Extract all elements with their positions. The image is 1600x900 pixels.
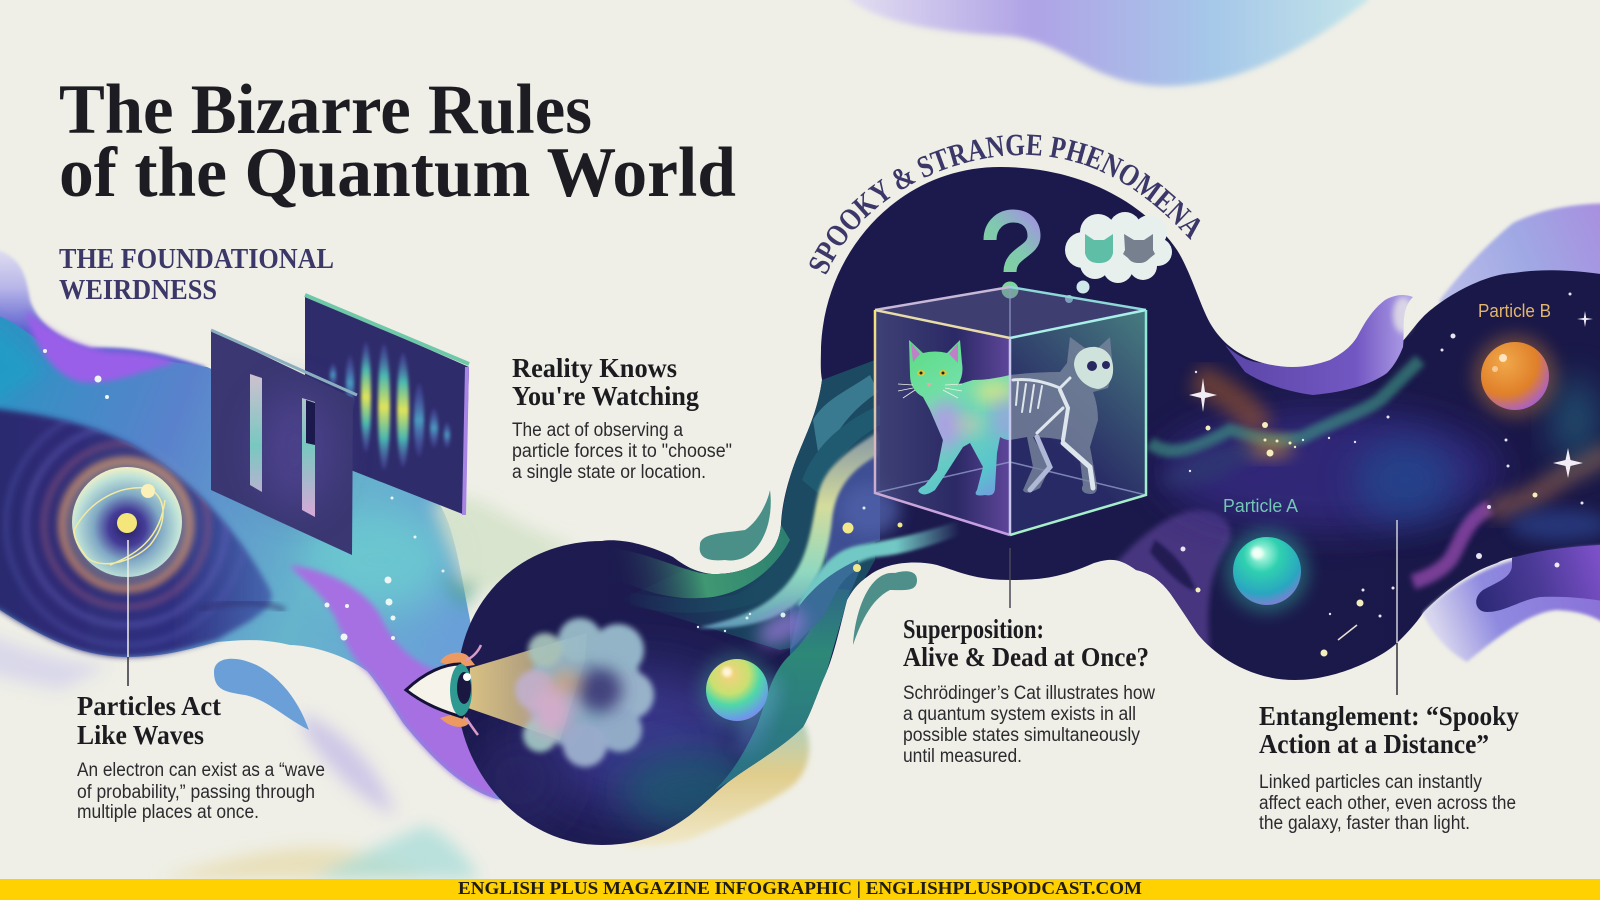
text block: particles act like waves: An electron can exist as a “wave bbox=[77, 760, 325, 781]
title: The Bizarre Rules bbox=[59, 71, 592, 149]
text block: superposition: Alive & Dead at Once? bbox=[903, 642, 1149, 672]
text block: superposition: Schrödinger’s Cat illustrates how bbox=[903, 683, 1155, 704]
living half bbox=[909, 340, 1009, 496]
text block: superposition bbox=[903, 614, 1155, 767]
purple crest of the entanglement field bbox=[1225, 295, 1413, 395]
flow base bbox=[646, 360, 875, 650]
section heading foundational weirdness: THE FOUNDATIONAL bbox=[59, 244, 334, 275]
dark wave with ripples around the electron bbox=[0, 405, 285, 657]
probability cloud bbox=[515, 618, 654, 767]
green band bbox=[628, 525, 790, 598]
main dark observer and phenomena blob bbox=[457, 167, 1600, 845]
cat body half alive half skeleton bbox=[898, 335, 1113, 500]
text block: particles act like waves: multiple places at once. bbox=[77, 802, 259, 823]
foundational wave stream bbox=[0, 247, 500, 800]
text block: reality knows you're watching: You're Watching bbox=[512, 381, 699, 411]
text block: reality knows you're watching: a single state or location. bbox=[512, 462, 706, 483]
electron sphere bbox=[63, 458, 191, 586]
flow star dust bbox=[842, 522, 902, 572]
text block: entanglement: Entanglement: “Spooky bbox=[1259, 701, 1519, 731]
observer glow bbox=[530, 670, 750, 810]
text block: particles act like waves bbox=[77, 691, 325, 823]
bottom left wash bbox=[160, 825, 480, 879]
callout line: superposition bbox=[1009, 548, 1011, 608]
text block: entanglement: the galaxy, faster than light. bbox=[1259, 813, 1470, 834]
eye observer with beam bbox=[406, 633, 587, 740]
section heading foundational weirdness: WEIRDNESS bbox=[59, 275, 217, 306]
lilac band above the entanglement field bbox=[1440, 203, 1600, 320]
callout line: particles bbox=[127, 540, 129, 686]
lilac wave with dark finger bbox=[1423, 544, 1600, 662]
interior of flow bbox=[826, 440, 880, 570]
back edges bbox=[875, 287, 1146, 495]
text block: entanglement: affect each other, even across the bbox=[1259, 793, 1516, 814]
particle B bbox=[1473, 301, 1557, 418]
callout line: entanglement bbox=[1396, 520, 1398, 695]
text block: entanglement: Action at a Distance” bbox=[1259, 729, 1489, 759]
title bbox=[59, 71, 736, 212]
footer bar: ENGLISH PLUS MAGAZINE INFOGRAPHIC | ENGLISHPLUSPODCAST.COM bbox=[458, 878, 1142, 898]
text block: entanglement bbox=[1259, 701, 1519, 834]
ghost half bbox=[1010, 337, 1113, 494]
text block: superposition: a quantum system exists in all bbox=[903, 704, 1136, 725]
double slit illustration bbox=[211, 295, 469, 555]
upper teal bands bbox=[813, 375, 878, 452]
slit barrier bbox=[211, 330, 357, 555]
stream star dust bbox=[43, 349, 444, 640]
text block: superposition: until measured. bbox=[903, 746, 1022, 767]
nebula clouds bbox=[1160, 410, 1500, 530]
purple stream bbox=[290, 565, 500, 800]
sparkle stars bbox=[1189, 311, 1593, 478]
text block: reality knows you're watching: particle forces it to "choose" bbox=[512, 441, 732, 462]
footer bar bbox=[0, 878, 1600, 900]
transparent box with the cat bbox=[875, 287, 1146, 535]
text block: particles act like waves: Particles Act bbox=[77, 691, 221, 721]
section heading foundational weirdness bbox=[59, 244, 334, 306]
top right colour wash bbox=[850, 0, 1368, 86]
title: of the Quantum World bbox=[59, 134, 736, 212]
text block: reality knows you're watching bbox=[512, 353, 732, 483]
text block: particles act like waves: Like Waves bbox=[77, 720, 204, 750]
particle A bbox=[1223, 496, 1309, 613]
particle B: Particle B bbox=[1478, 301, 1551, 321]
text block: reality knows you're watching: Reality Knows bbox=[512, 353, 677, 383]
text block: particles act like waves: of probability,” passing through bbox=[77, 782, 315, 803]
purple patch in the entanglement field bbox=[1110, 510, 1231, 650]
observed particle bbox=[699, 652, 775, 728]
gold wash under the flow bbox=[620, 722, 809, 846]
section heading: spooky and strange phenomena: SPOOKY & STRANGE PHENOMENA bbox=[810, 134, 1200, 274]
detection screen with interference fringes bbox=[305, 295, 469, 515]
purple crest bbox=[25, 310, 175, 383]
skull bbox=[1074, 347, 1113, 389]
text block: superposition: possible states simultaneously bbox=[903, 725, 1140, 746]
bones bbox=[1013, 378, 1093, 490]
question mark icon bbox=[990, 216, 1034, 298]
text block: superposition: Superposition: bbox=[903, 614, 1044, 644]
text block: reality knows you're watching: The act of observing a bbox=[512, 420, 683, 441]
star dust bbox=[1196, 422, 1538, 656]
text block: entanglement: Linked particles can instantly bbox=[1259, 772, 1482, 793]
light flow band bbox=[697, 432, 878, 628]
small green tails bbox=[700, 490, 917, 645]
lower teal band bbox=[715, 588, 850, 790]
front edges bbox=[875, 287, 1146, 535]
pale green and gold wash behind the observer blob bbox=[432, 496, 575, 610]
small blue tail bbox=[214, 659, 309, 730]
thought bubble with cat icons bbox=[1065, 212, 1172, 303]
pale lilac wash left bbox=[0, 632, 395, 815]
particle A: Particle A bbox=[1223, 496, 1298, 516]
